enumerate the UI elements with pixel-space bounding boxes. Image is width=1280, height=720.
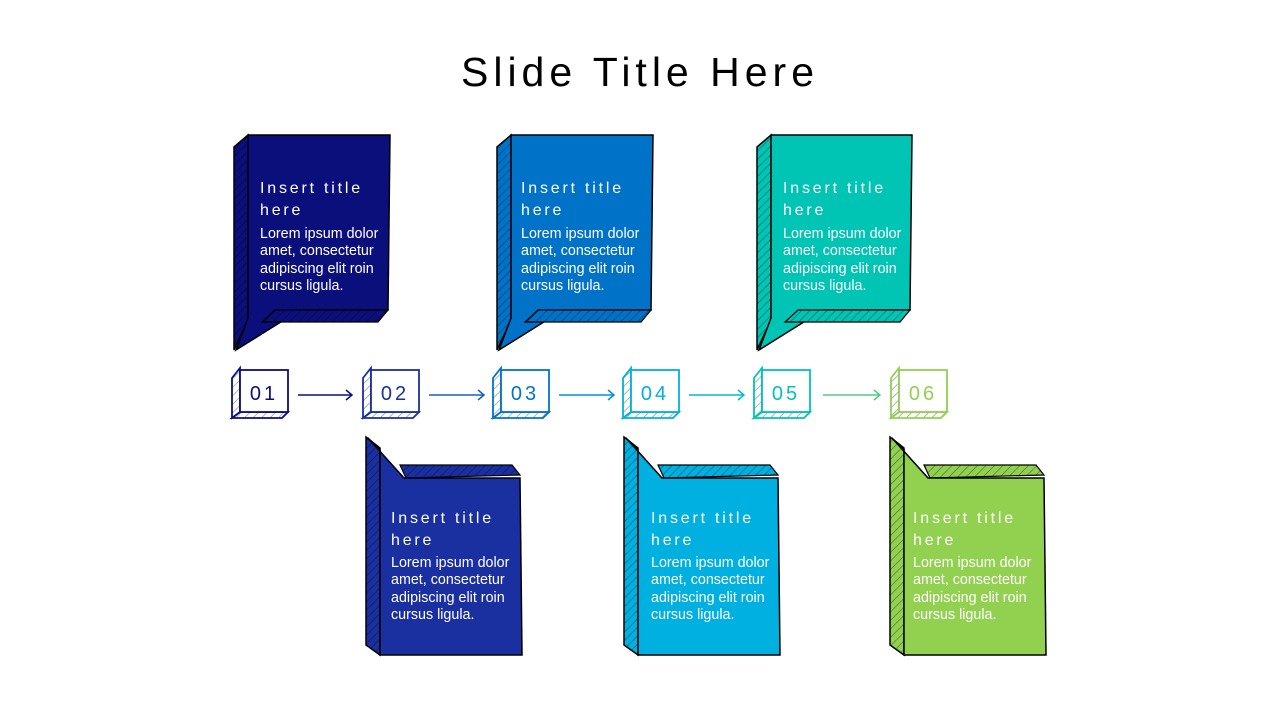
callout 3: Lorem ipsum dolor: [521, 226, 640, 242]
callout 4: Lorem ipsum dolor: [651, 555, 770, 571]
callout 3: adipiscing elit roin: [521, 261, 635, 277]
callout 3: Insert title: [521, 180, 624, 197]
number box 04: 04: [641, 383, 669, 405]
arrow 2: [429, 390, 484, 400]
number box 04: [623, 368, 679, 418]
arrow 4: [689, 390, 744, 400]
callout 1: adipiscing elit roin: [260, 261, 374, 277]
callout 3: cursus ligula.: [521, 278, 604, 294]
callout 5: here: [783, 202, 826, 219]
callout 1: cursus ligula.: [260, 278, 343, 294]
callout 4: here: [651, 532, 694, 549]
number box 02: 02: [381, 383, 409, 405]
callout 6: adipiscing elit roin: [913, 590, 1027, 606]
callout 1: amet, consectetur: [260, 243, 374, 259]
callout 5: [757, 135, 912, 350]
callout 6: cursus ligula.: [913, 607, 996, 623]
title: Slide Title Here: [461, 49, 819, 95]
number box 03: [493, 368, 549, 418]
number box 06: 06: [909, 383, 937, 405]
callout 6: amet, consectetur: [913, 572, 1027, 588]
callout 2: Insert title: [391, 510, 494, 527]
number box 01: [232, 368, 288, 418]
number box 02: [363, 368, 419, 418]
callout 2: here: [391, 532, 434, 549]
callout 5: amet, consectetur: [783, 243, 897, 259]
callout 4: [624, 437, 780, 655]
callout 6: Lorem ipsum dolor: [913, 555, 1032, 571]
callout 4: Insert title: [651, 510, 754, 527]
number box 05: 05: [772, 383, 800, 405]
callout 4: adipiscing elit roin: [651, 590, 765, 606]
callout 5: Insert title: [783, 180, 886, 197]
callout 2: amet, consectetur: [391, 572, 505, 588]
arrow 5: [823, 390, 880, 400]
callout 6: Insert title: [913, 510, 1016, 527]
callout 1: [234, 135, 390, 350]
callout 2: cursus ligula.: [391, 607, 474, 623]
callout 2: [366, 437, 522, 655]
callout 3: [497, 135, 653, 350]
callout 2: adipiscing elit roin: [391, 590, 505, 606]
callout 5: Lorem ipsum dolor: [783, 226, 902, 242]
callout 2: Lorem ipsum dolor: [391, 555, 510, 571]
number box 06: [891, 368, 947, 418]
callout 6: [890, 437, 1046, 655]
callout 3: amet, consectetur: [521, 243, 635, 259]
callout 1: here: [260, 202, 303, 219]
callout 4: cursus ligula.: [651, 607, 734, 623]
callout 1: Lorem ipsum dolor: [260, 226, 379, 242]
arrow 3: [559, 390, 614, 400]
callout 5: cursus ligula.: [783, 278, 866, 294]
callout 5: adipiscing elit roin: [783, 261, 897, 277]
callout 6: here: [913, 532, 956, 549]
callout 1: Insert title: [260, 180, 363, 197]
number box 01: 01: [250, 383, 278, 405]
number box 05: [754, 368, 810, 418]
arrow 1: [298, 390, 352, 400]
number box 03: 03: [511, 383, 539, 405]
callout 3: here: [521, 202, 564, 219]
callout 4: amet, consectetur: [651, 572, 765, 588]
